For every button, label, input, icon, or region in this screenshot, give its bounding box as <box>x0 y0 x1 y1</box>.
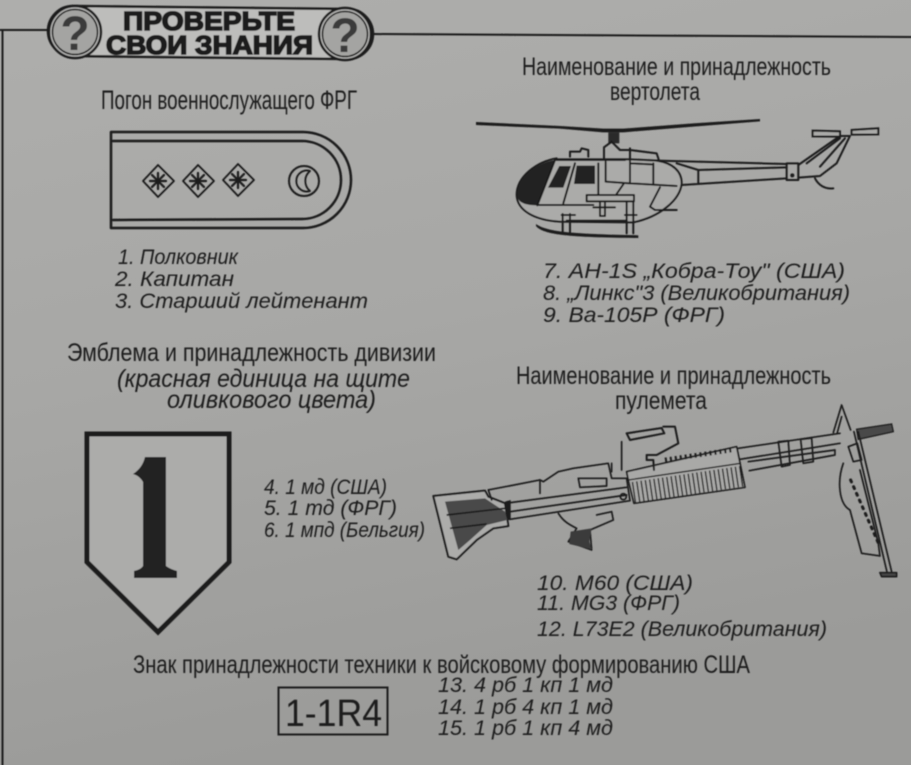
title <box>106 6 313 60</box>
barrel and clamps <box>738 433 840 471</box>
epaulette drawing <box>111 132 351 228</box>
heading: machine gun: пулемета <box>615 387 707 415</box>
heading: helicopter <box>522 53 831 106</box>
answer options 4-6 <box>264 476 425 542</box>
panel: helicopter <box>476 53 878 327</box>
answer options 13-15 <box>438 674 613 740</box>
header banner <box>48 6 373 63</box>
answer options 10-12: 11. MG3 (ФРГ) <box>537 592 680 615</box>
heading: machine gun: Наименование и принадлежность <box>516 362 831 390</box>
heading: division emblem: (красная единица на щите <box>117 365 410 393</box>
flash hider <box>857 424 893 439</box>
heading: division emblem: Эмблема и принадлежность дивизии <box>67 339 436 367</box>
answer options 13-15: 14. 1 рб 4 кп 1 мд <box>438 696 613 719</box>
heading: machine gun <box>516 362 831 415</box>
stock <box>433 491 508 559</box>
heading: helicopter: вертолета <box>610 78 700 106</box>
pistol grip <box>505 500 613 550</box>
answer options 1-3: 2. Капитан <box>114 268 234 291</box>
title: СВОИ ЗНАНИЯ <box>106 30 313 60</box>
heading: vehicle marking: Знак принадлежности техники к войсковому формированию США <box>133 651 750 679</box>
panel: division emblem <box>67 339 436 632</box>
answer options 4-6: 5. 1 тд (ФРГ) <box>264 497 397 520</box>
answer options 1-3: 3. Старший лейтенант <box>115 290 368 313</box>
icon: left question mark medallion <box>49 6 101 61</box>
panel: vehicle marking <box>133 651 750 740</box>
icon: left question mark medallion: ? <box>60 8 90 61</box>
answer options 4-6: 4. 1 мд (США) <box>264 476 387 499</box>
title: ПРОВЕРЬТЕ <box>123 6 295 36</box>
icon: right question mark medallion <box>319 8 371 63</box>
shield emblem <box>87 434 229 632</box>
machine gun drawing <box>433 405 897 577</box>
answer options 13-15: 15. 1 рб 1 кп 4 мд <box>438 717 613 740</box>
carrying handle <box>627 427 678 470</box>
icon: right question mark medallion: ? <box>330 10 360 63</box>
heading: division emblem: оливкового цвета) <box>167 386 376 414</box>
front sight <box>833 405 851 433</box>
panel: shoulder board <box>101 85 368 313</box>
panel: machine gun <box>433 362 897 641</box>
heading: shoulder board: Погон военнослужащего ФРГ <box>101 85 357 115</box>
answer options 13-15: 13. 4 рб 1 кп 1 мд <box>438 674 613 697</box>
heading: helicopter: Наименование и принадлежность <box>522 53 831 81</box>
heading: division emblem <box>67 339 436 414</box>
answer options 10-12: 12. L73E2 (Великобритания) <box>537 618 827 641</box>
answer options 10-12: 10. М60 (США) <box>537 572 693 595</box>
answer options 7-9 <box>543 260 850 327</box>
receiver <box>488 442 630 519</box>
answer options 7-9: 7. АН-1S „Кобра-Тоу" (США) <box>543 260 845 283</box>
answer options 1-3: 1. Полковник <box>118 246 239 269</box>
answer options 7-9: 9. Ва-105Р (ФРГ) <box>543 304 725 327</box>
answer options 1-3 <box>114 246 368 313</box>
handguard with ribs <box>627 447 745 503</box>
marking box: 1-1R4 <box>285 693 382 735</box>
bipod <box>840 432 897 577</box>
answer options 7-9: 8. „Линкс"3 (Великобритания) <box>543 282 850 305</box>
helicopter drawing <box>476 119 878 238</box>
answer options 10-12 <box>537 572 827 641</box>
answer options 4-6: 6. 1 мпд (Бельгия) <box>264 519 425 542</box>
